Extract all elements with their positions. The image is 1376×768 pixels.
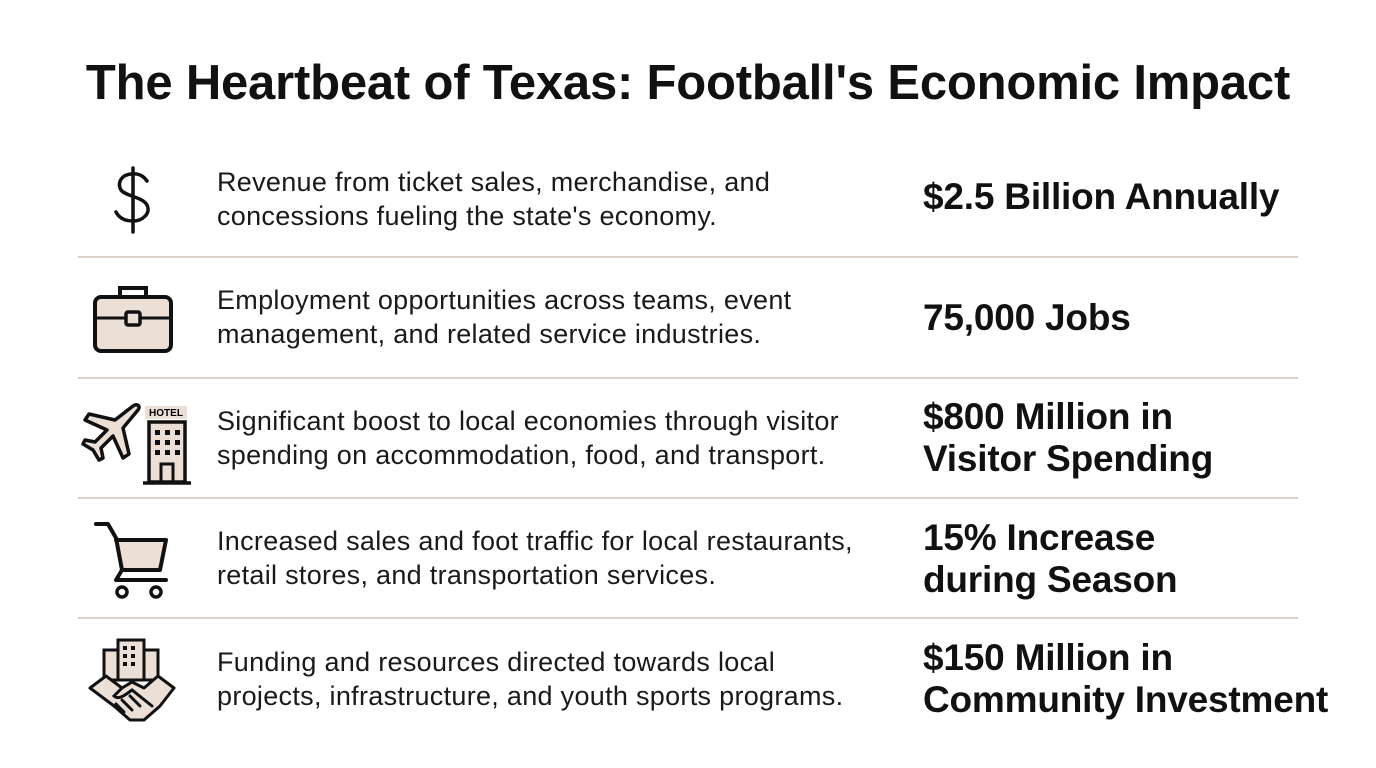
description xyxy=(217,285,791,349)
row 4: local business xyxy=(94,517,1177,600)
value: 75,000 Jobs xyxy=(923,297,1131,338)
value: Visitor Spending xyxy=(923,438,1213,479)
description: Revenue from ticket sales, merchandise, and xyxy=(217,167,770,197)
value: $150 Million in xyxy=(923,637,1173,678)
description: projects, infrastructure, and youth sports programs. xyxy=(217,681,843,711)
value: 15% Increase xyxy=(923,517,1155,558)
value xyxy=(923,396,1213,479)
value: $2.5 Billion Annually xyxy=(923,176,1279,217)
icon: plane and hotel: HOTEL xyxy=(149,408,183,419)
icon: cart xyxy=(94,522,168,599)
value: Community Investment xyxy=(923,679,1328,720)
row 1: revenue xyxy=(114,166,1280,234)
icon: dollar xyxy=(114,166,150,234)
description: Increased sales and foot traffic for local restaurants, xyxy=(217,526,853,556)
value xyxy=(923,637,1328,720)
title: The Heartbeat of Texas: Football's Economic Impact xyxy=(86,56,1290,110)
value: during Season xyxy=(923,559,1177,600)
description: Significant boost to local economies through visitor xyxy=(217,406,839,436)
description: retail stores, and transportation services. xyxy=(217,560,716,590)
description: management, and related service industries. xyxy=(217,319,761,349)
description xyxy=(217,526,853,590)
description: concessions fueling the state's economy. xyxy=(217,201,717,231)
row 5: community xyxy=(88,637,1328,722)
value xyxy=(923,517,1177,600)
description: spending on accommodation, food, and transport. xyxy=(217,440,825,470)
row 3: visitors xyxy=(81,396,1213,485)
icon: buildings and handshake xyxy=(88,638,176,722)
value: $800 Million in xyxy=(923,396,1173,437)
description xyxy=(217,406,839,470)
description: Funding and resources directed towards local xyxy=(217,647,775,677)
icon: plane and hotel xyxy=(81,403,191,485)
row 2: jobs xyxy=(93,285,1131,353)
description xyxy=(217,167,770,231)
description: Employment opportunities across teams, event xyxy=(217,285,791,315)
description xyxy=(217,647,843,711)
icon: briefcase xyxy=(93,286,173,353)
